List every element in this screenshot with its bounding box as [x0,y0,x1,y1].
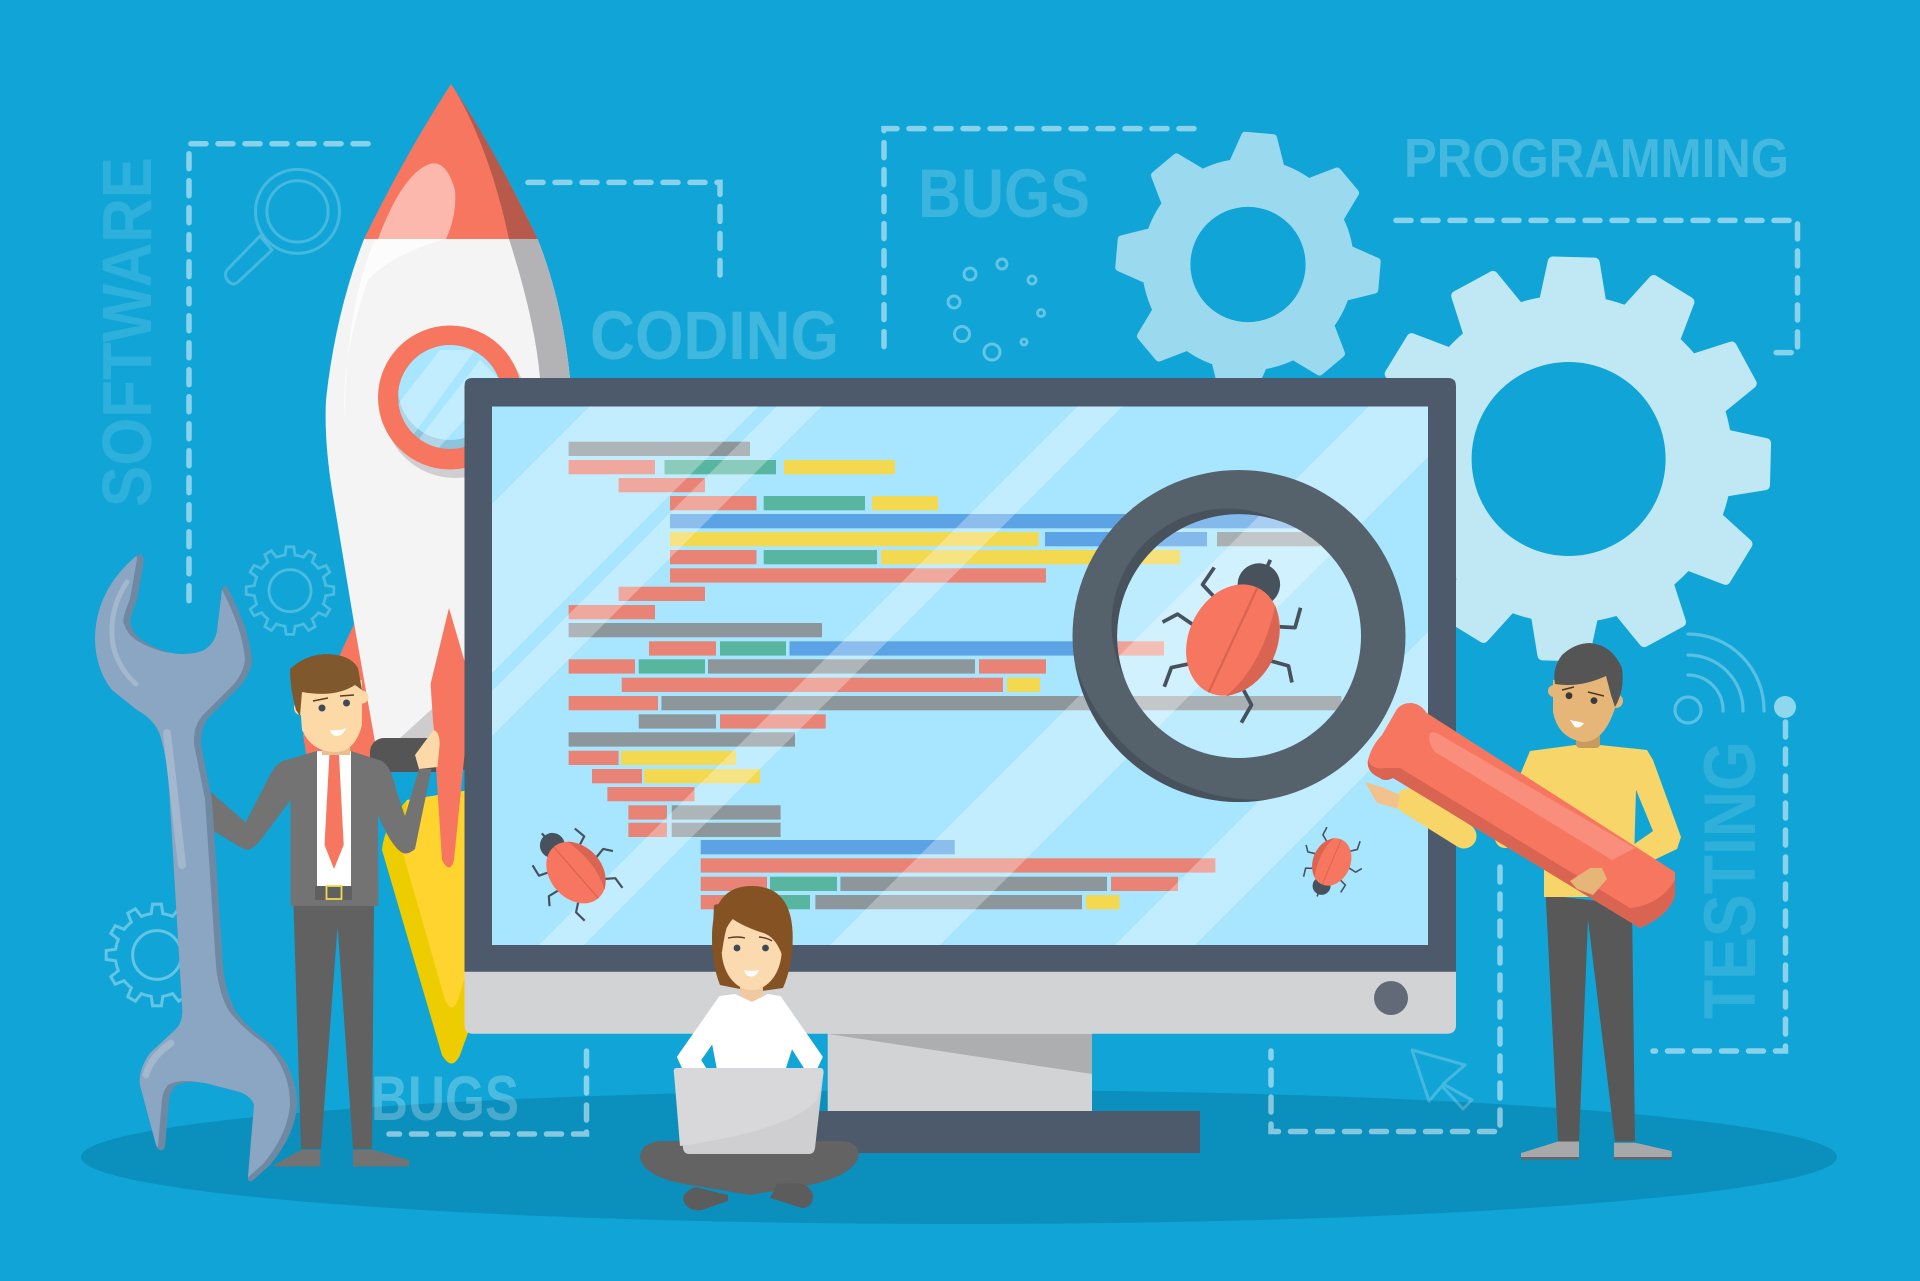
monitor [464,378,1456,1153]
seated woman [640,886,859,1210]
yellow man shoes [1521,1142,1672,1160]
icon: outline gear lower [106,904,208,1006]
monitor chin [464,960,1456,1034]
rocket nose [364,84,538,239]
monitor stand [828,1030,1092,1111]
rocket window [370,326,527,480]
icon: wifi signal [1675,634,1764,723]
icon: testing dot [1774,696,1796,718]
man hand [415,730,440,769]
rocket body [326,239,600,742]
yellow man torso [1520,745,1647,897]
icon: cursor [1412,1050,1472,1109]
man in yellow [1365,643,1681,1160]
man legs [294,905,374,1149]
yellow man near arm [1408,801,1464,836]
man in suit [205,654,440,1166]
large gear [1371,261,1766,657]
yellow man sleeve stub [1495,828,1515,848]
ground ellipse [81,1090,1837,1224]
rocket yellow flame [382,790,470,1064]
man belt [315,886,352,900]
laptop [674,1068,824,1154]
rocket centre fin [431,608,470,868]
monitor bezel [464,378,1456,972]
screen glare bands [492,406,1428,945]
woman shirt [678,995,822,1068]
label: PROGRAMMING: PROGRAMMING [1404,127,1789,189]
yellow man gripping hand [1570,868,1607,895]
icon: outline magnifier [225,169,340,284]
label: CODING: CODING [590,297,839,374]
woman neck [740,985,763,1002]
yellow man legs [1546,895,1635,1142]
label: TESTING: TESTING [1690,741,1771,1019]
yellow man far arm [1600,750,1681,881]
label: BUGS bottom: BUGS [371,1064,519,1134]
woman face [712,892,792,990]
yellow man head [1548,643,1623,748]
magnified bug [1138,530,1335,735]
woman legs [640,1141,859,1195]
small gear [1118,135,1378,394]
man shirt [317,751,351,886]
dashed frames [189,129,1798,1134]
woman feet [683,1183,813,1210]
code bars [569,442,1341,909]
man shoes [274,1150,409,1166]
giant red tube [1368,703,1675,928]
woman hair [712,886,793,992]
rocket left fin [303,624,376,765]
magnifying glass [1072,470,1406,802]
man jacket and arms [205,751,431,906]
rocket nozzle [370,738,470,772]
rocket [303,84,570,1064]
ring [1072,470,1406,802]
screen [492,406,1428,945]
icon: dot ring [948,259,1044,360]
wrench [88,554,297,1181]
icon: outline gear upper [246,547,334,634]
small bug left [510,806,635,932]
lens tint [1115,512,1363,760]
yellow man open hand [1365,782,1400,809]
man tie [324,755,344,869]
monitor base [815,1111,1200,1153]
label: SOFTWARE: SOFTWARE [88,157,166,507]
small bug right [1289,822,1371,908]
label: BUGS top: BUGS [918,155,1090,232]
power button [1374,981,1408,1015]
man head [290,654,368,755]
